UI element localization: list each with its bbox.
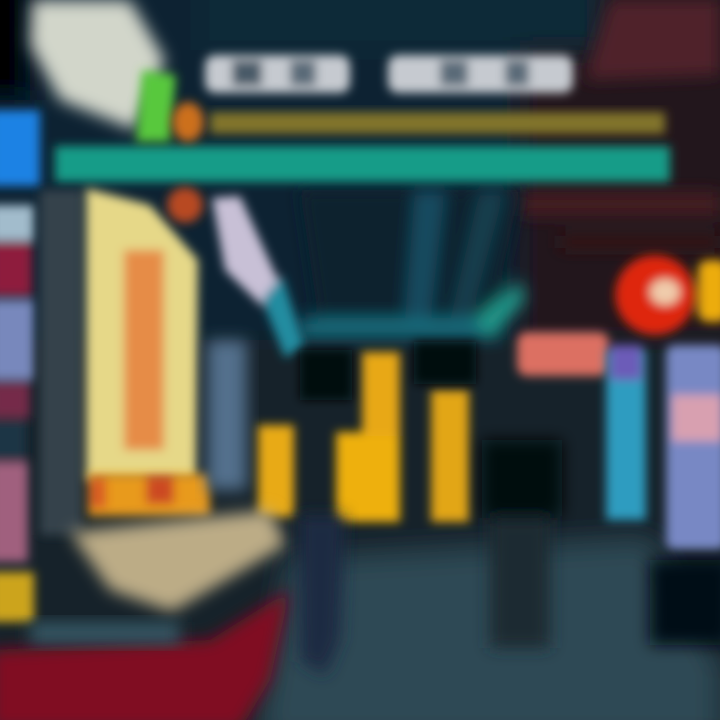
white hanging banner [30, 0, 165, 130]
red foreground [0, 590, 290, 720]
title (illegible in reference) [205, 55, 573, 93]
blue-grey column [207, 340, 247, 490]
left edge stripes [0, 110, 40, 622]
pink sign [517, 332, 609, 376]
pale diagonal banner [212, 196, 304, 358]
cyan column [606, 345, 646, 520]
orange flag [172, 102, 204, 142]
right poster [666, 345, 720, 550]
grey pillar [40, 190, 82, 535]
orange row under poster [88, 474, 210, 516]
dark lower right block [650, 560, 720, 645]
red circle icon [615, 255, 720, 335]
subtitle strip [210, 112, 665, 134]
yellow poster [86, 188, 198, 480]
bar chart: yellow bars [258, 352, 469, 522]
figure in centre [298, 515, 345, 675]
green flag [136, 70, 176, 142]
beige table [70, 510, 286, 612]
ceiling light lines [300, 190, 525, 340]
figure on right [482, 440, 562, 648]
teal banner [55, 146, 670, 182]
red-orange round marker [167, 187, 203, 223]
top right maroon awning [520, 0, 720, 249]
grey-blue ledge above red [30, 622, 180, 644]
black blocks over bars [300, 342, 476, 400]
